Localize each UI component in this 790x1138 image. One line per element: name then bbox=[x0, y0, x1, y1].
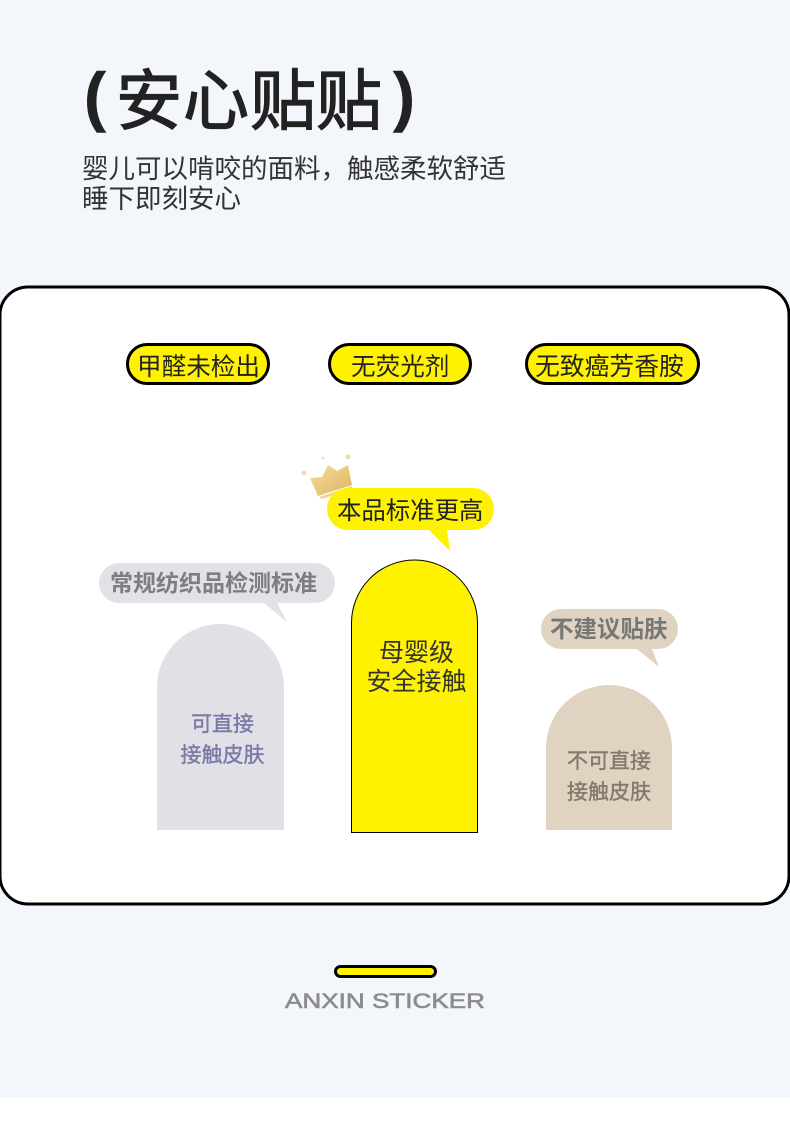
title: ) bbox=[393, 59, 415, 133]
callout: higher standard bbox=[327, 488, 494, 551]
badge: no fluorescent agent bbox=[330, 344, 470, 384]
footer label: ANXIN STICKER bbox=[285, 990, 485, 1013]
panel: comparison card bbox=[0, 287, 789, 904]
callout: not recommended: 不建议贴肤 bbox=[550, 616, 668, 642]
subtitle: 睡下即刻安心 bbox=[82, 184, 241, 214]
column: infant grade: 母婴级 bbox=[379, 639, 454, 667]
callout: ordinary textile standard: 常规纺织品检测标准 bbox=[110, 570, 317, 596]
icon: gold crown bbox=[302, 454, 352, 499]
badge: no carcinogenic aromatic amines: 无致癌芳香胺 bbox=[535, 353, 684, 381]
column: direct skin contact: 可直接 bbox=[191, 713, 254, 736]
badge: no fluorescent agent: 无荧光剂 bbox=[351, 353, 449, 381]
column: direct skin contact bbox=[157, 624, 284, 830]
title: ( bbox=[84, 59, 106, 133]
column: not for direct skin contact bbox=[546, 685, 672, 830]
column: direct skin contact: 接触皮肤 bbox=[180, 744, 264, 767]
title: 安心贴贴 bbox=[116, 64, 382, 138]
subtitle: 婴儿可以啃咬的面料，触感柔软舒适 bbox=[82, 154, 506, 184]
footer bar bbox=[336, 966, 436, 976]
badge: no carcinogenic aromatic amines bbox=[526, 344, 698, 384]
column: not for direct skin contact: 接触皮肤 bbox=[567, 781, 651, 804]
badge: no formaldehyde bbox=[128, 344, 268, 384]
subtitle bbox=[82, 154, 506, 214]
column: not for direct skin contact: 不可直接 bbox=[567, 750, 651, 773]
callout: not recommended bbox=[541, 609, 678, 667]
badge: no formaldehyde: 甲醛未检出 bbox=[137, 353, 260, 381]
column: infant grade: 安全接触 bbox=[366, 668, 467, 696]
column: infant grade bbox=[352, 560, 478, 832]
callout: higher standard: 本品标准更高 bbox=[337, 498, 483, 525]
callout: ordinary textile standard bbox=[99, 563, 335, 622]
